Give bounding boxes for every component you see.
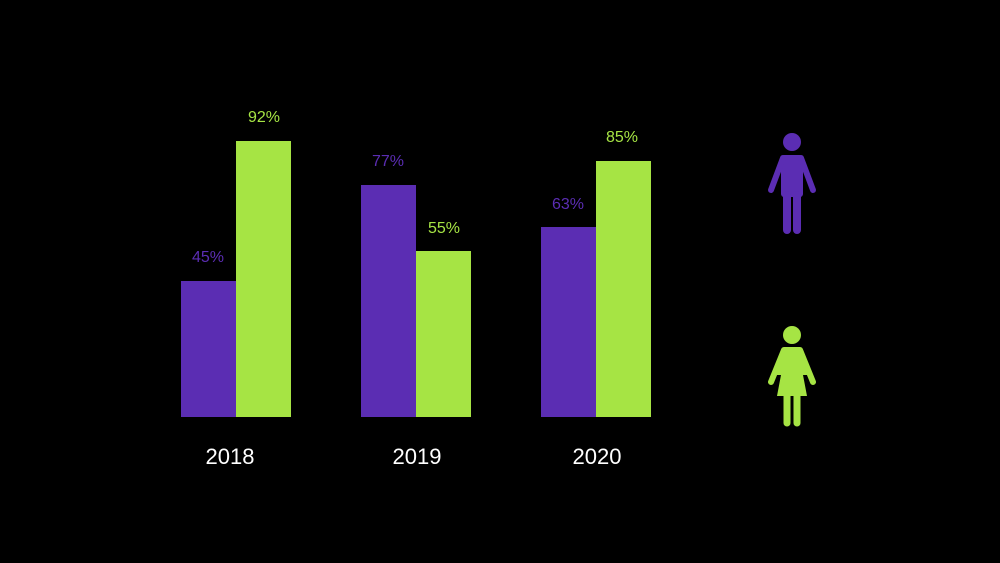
label: 45%: 45% <box>192 249 224 266</box>
label: 92%: 92% <box>248 109 280 126</box>
bar: 2020 purple 63% <box>541 227 596 417</box>
label: 77%: 77% <box>372 153 404 170</box>
label: 63%: 63% <box>552 196 584 213</box>
bar: 2020 green 85% <box>596 161 651 417</box>
label: 85%: 85% <box>606 129 638 146</box>
chart: 2020 group <box>541 129 651 417</box>
year label 2019: 2019 <box>393 444 441 469</box>
bar: 2018 purple 45% <box>181 281 236 417</box>
chart: 2019 group <box>361 153 471 417</box>
bar: 2019 purple 77% <box>361 185 416 417</box>
icon: female <box>768 326 816 426</box>
chart: 2018 group <box>181 109 291 417</box>
bar: 2018 green 92% <box>236 141 291 417</box>
bar: 2019 green 55% <box>416 251 471 417</box>
label: 55%: 55% <box>428 220 460 237</box>
year label 2018: 2018 <box>206 444 254 469</box>
icon: male <box>768 133 816 234</box>
year label 2020: 2020 <box>573 444 621 469</box>
